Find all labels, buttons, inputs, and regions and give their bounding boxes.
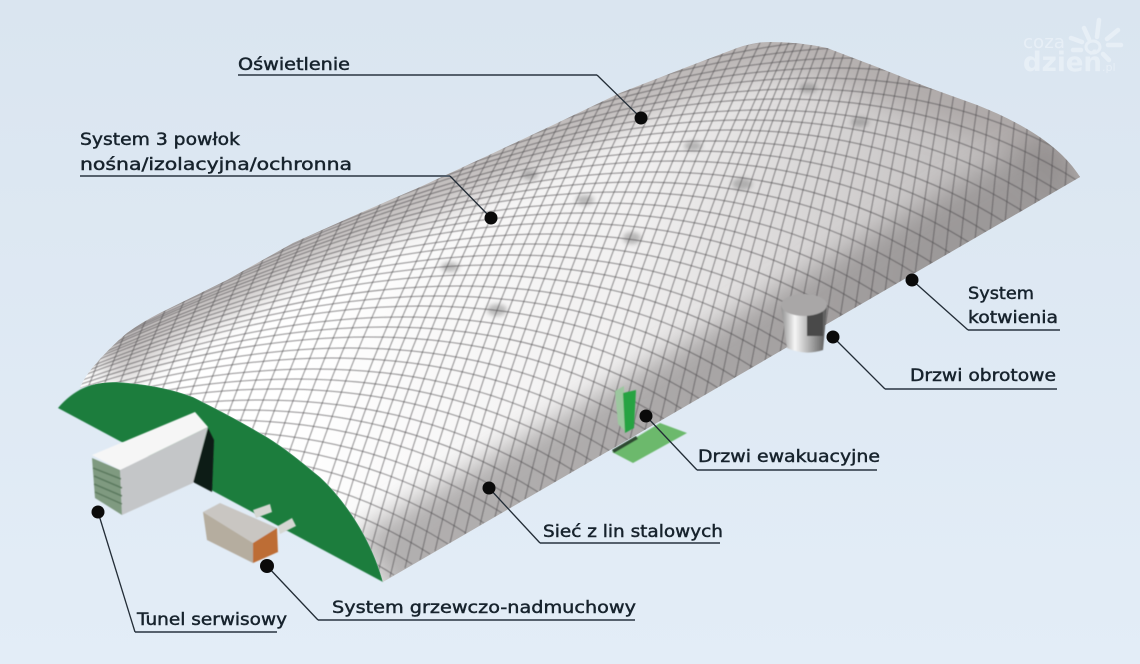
label: System 3 powłok: nośna/izolacyjna/ochronna <box>80 155 352 174</box>
service tunnel <box>92 412 214 515</box>
label: Drzwi ewakuacyjne: Drzwi ewakuacyjne <box>698 447 880 466</box>
steel cable net <box>80 42 1080 578</box>
label: Oświetlenie <box>238 55 648 124</box>
label: System kotwienia <box>906 274 1060 330</box>
revolving door <box>781 294 827 353</box>
label: System 3 powłok: System 3 powłok <box>80 130 241 149</box>
label: Tunel serwisowy <box>92 506 287 632</box>
skylights <box>441 83 869 316</box>
green end wall of the dome <box>58 382 383 582</box>
dome surface shading <box>80 44 1080 582</box>
label: Drzwi obrotowe: Drzwi obrotowe <box>910 366 1056 385</box>
label: System 3 powłok <box>80 130 498 224</box>
watermark: coza dzien.pl: coza <box>1023 32 1065 53</box>
label: Sieć z lin stalowych <box>482 482 723 543</box>
label: System grzewczo-nadmuchowy <box>260 559 636 620</box>
label: Tunel serwisowy: Tunel serwisowy <box>136 610 287 629</box>
dome shading: dark band along the base <box>383 177 1080 582</box>
dome shading: grey band below the silhouette <box>100 42 1080 360</box>
infographic: air-supported dome structure <box>58 42 1080 633</box>
label: Sieć z lin stalowych: Sieć z lin stalowych <box>543 522 723 541</box>
watermark: coza dzien.pl <box>1023 20 1121 78</box>
label: Oświetlenie: Oświetlenie <box>238 55 350 74</box>
label: Drzwi obrotowe <box>826 330 1057 389</box>
dome shell <box>80 42 1080 582</box>
watermark: coza dzien.pl: .pl <box>1102 61 1116 74</box>
emergency door <box>612 386 687 463</box>
watermark: coza dzien.pl: dzień <box>1023 47 1102 78</box>
label: Drzwi ewakuacyjne <box>640 410 880 470</box>
heating and blower unit <box>203 503 296 563</box>
label: System kotwienia: System <box>968 284 1034 303</box>
label: System grzewczo-nadmuchowy: System grzewczo-nadmuchowy <box>332 598 636 617</box>
label: System kotwienia: kotwienia <box>968 308 1058 327</box>
